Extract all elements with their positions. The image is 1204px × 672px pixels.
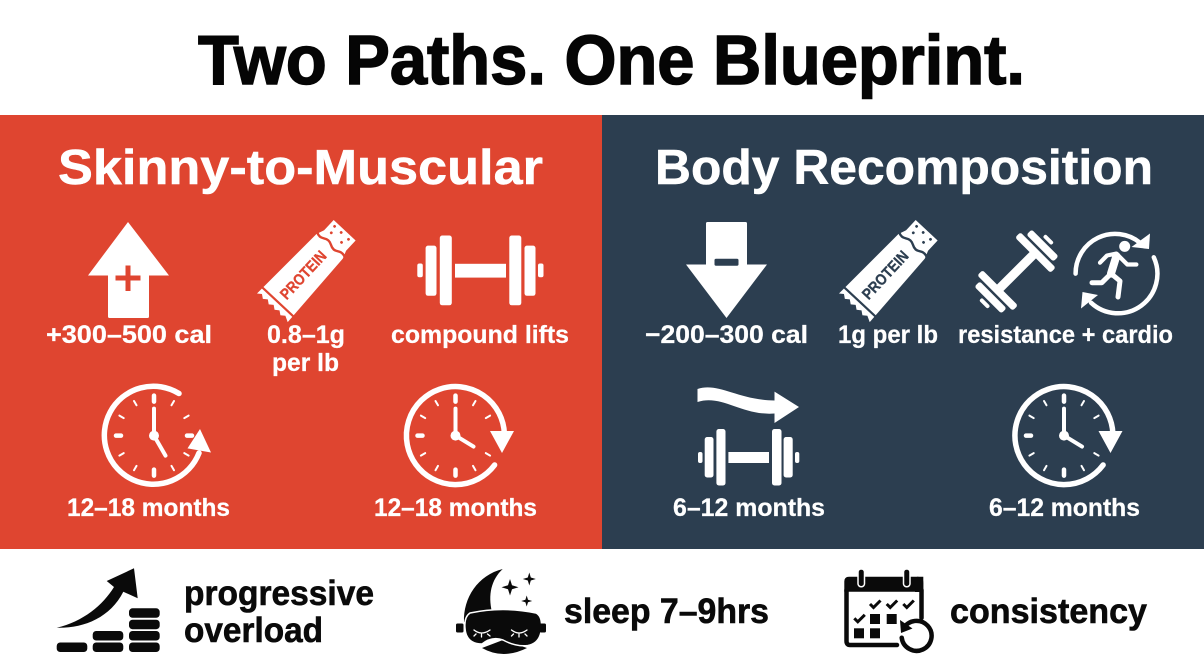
heading: Body Recomposition: Body Recomposition <box>655 141 1153 195</box>
icon: protein bar: PROTEIN <box>277 248 330 303</box>
icon: protein bar <box>257 216 360 322</box>
label: second timeline: 6–12 months <box>989 494 1140 522</box>
label: protein target: per lb <box>272 349 339 377</box>
label: first timeline: 12–18 months <box>67 494 230 522</box>
icon: clock with downward arrow <box>1015 387 1122 485</box>
icon: clock with downward arrow <box>406 387 514 485</box>
label: progressive overload <box>184 574 374 650</box>
icon: diagonal dumbbell <box>966 221 1067 322</box>
icon: clock with upward arrow <box>104 386 211 484</box>
panel: Body Recomposition <box>602 115 1204 549</box>
icon: swoosh arrow over dumbbell <box>698 387 799 486</box>
icon: protein bar: PROTEIN <box>859 248 912 303</box>
label: protein target: 0.8–1g <box>267 321 345 349</box>
label: calories surplus: +300–500 cal <box>46 321 212 349</box>
label: compound lifts: compound lifts <box>391 321 569 349</box>
label: first timeline: 6–12 months <box>673 494 825 522</box>
icon: moon and sleep mask <box>456 569 546 654</box>
label: resistance + cardio: resistance + cardio <box>958 321 1173 349</box>
label: consistency: consistency <box>950 592 1148 631</box>
label: second timeline: 12–18 months <box>374 494 537 522</box>
icon: dumbbell <box>417 236 544 305</box>
label: protein target: 1g per lb <box>838 321 938 349</box>
icon: up arrow with plus <box>88 222 169 318</box>
heading: Skinny-to-Muscular: Skinny-to-Muscular <box>58 141 543 195</box>
panel: Skinny-to-Muscular <box>0 115 602 549</box>
icon: protein bar <box>839 216 942 322</box>
label: sleep: sleep 7–9hrs <box>564 592 769 631</box>
icon: runner in cycle arrows <box>1076 234 1157 313</box>
icon: calendar with checkmarks and reset arrow <box>844 569 932 651</box>
label: progressive overload: progressive <box>184 574 374 613</box>
label: calorie deficit: −200–300 cal <box>645 321 808 349</box>
label: progressive overload: overload <box>184 611 323 650</box>
label: protein target <box>267 321 345 377</box>
title: Two Paths. One Blueprint. <box>198 21 1025 99</box>
icon: down arrow with minus <box>686 222 767 318</box>
icon: progressive overload <box>57 568 160 652</box>
